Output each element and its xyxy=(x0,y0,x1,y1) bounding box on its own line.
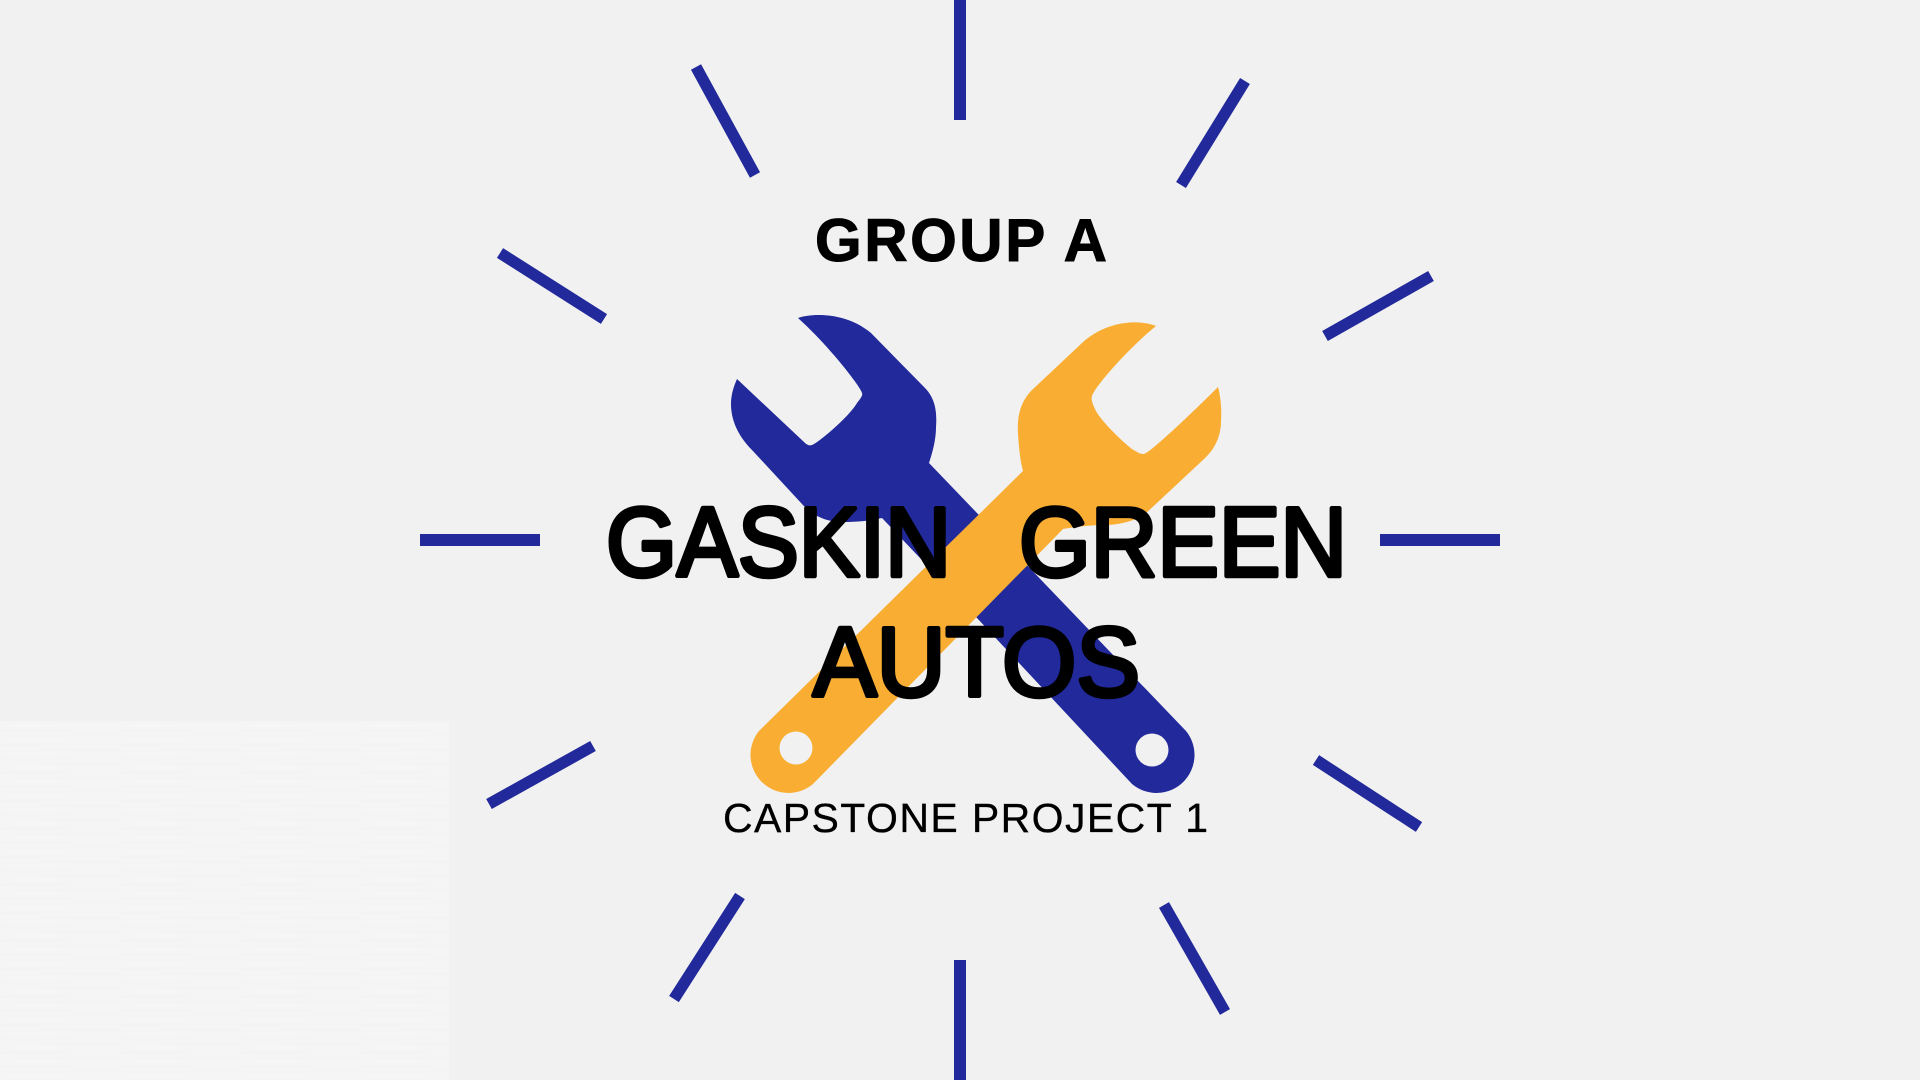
title: company name: AUTOS xyxy=(813,607,1140,717)
icon: blue wrench xyxy=(731,315,1194,793)
title: company name: GASKIN xyxy=(606,487,951,597)
title: company name: GREEN xyxy=(1019,487,1347,597)
subtitle: CAPSTONE PROJECT 1 xyxy=(723,795,1208,841)
textured paper panel xyxy=(0,721,449,1080)
title: company name xyxy=(606,487,1347,717)
radiating spokes xyxy=(420,0,1500,1080)
icon: blue wrench hole xyxy=(1136,734,1168,766)
icon: orange wrench hole xyxy=(780,732,812,764)
heading: group label: GROUP A xyxy=(815,207,1107,274)
icon: orange wrench xyxy=(751,322,1221,793)
